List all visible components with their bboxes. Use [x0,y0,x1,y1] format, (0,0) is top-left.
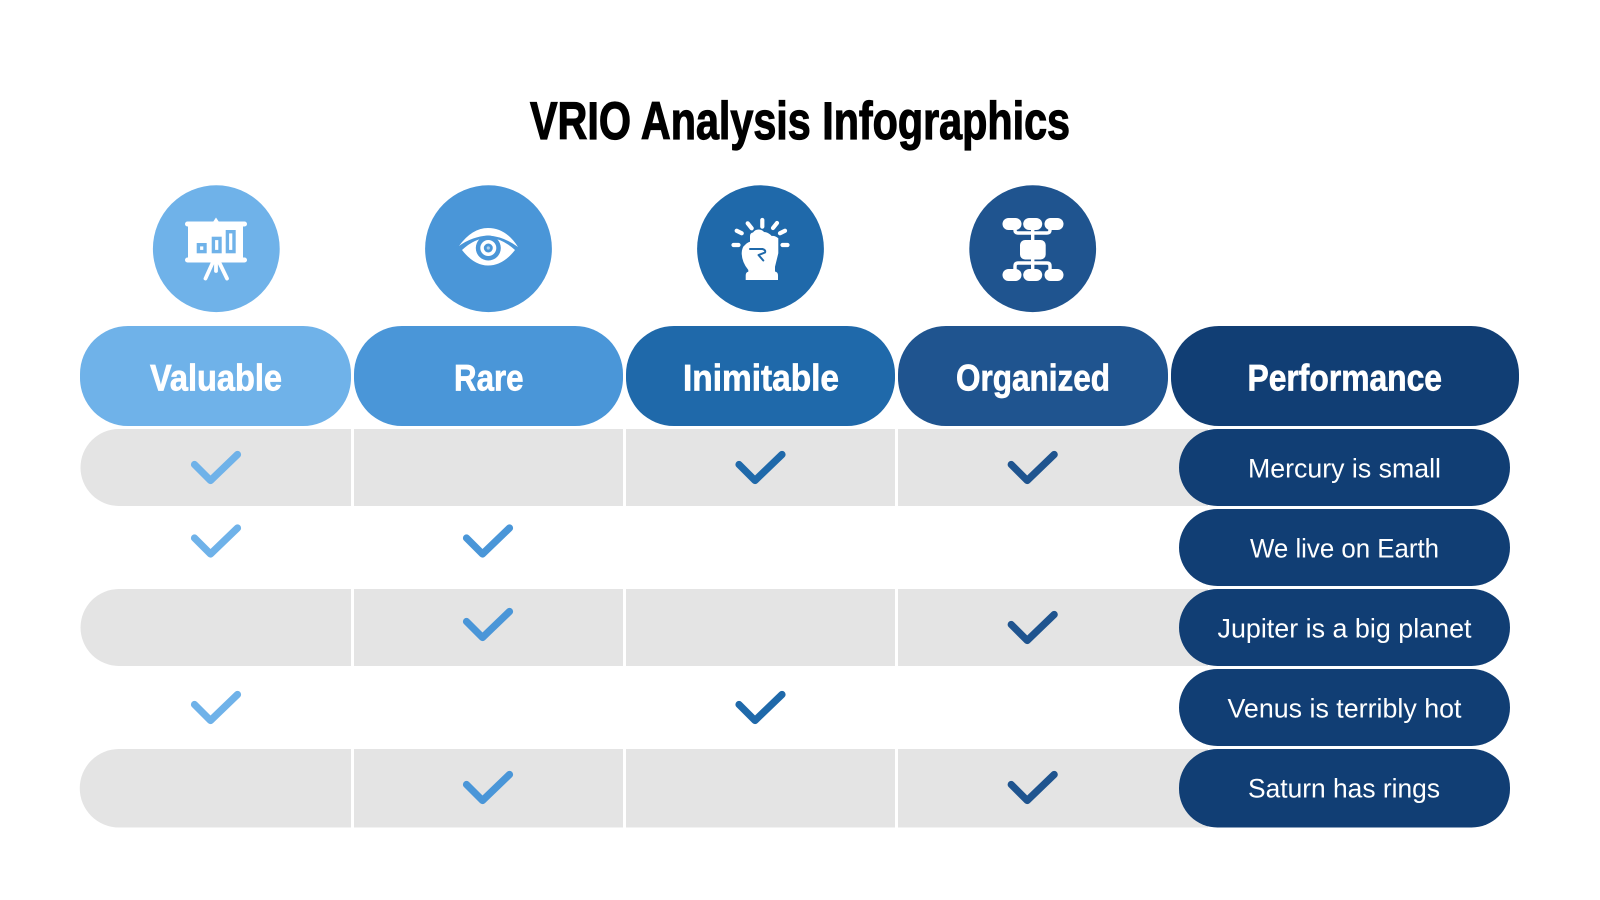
icon: organization chart [969,185,1096,312]
check: row 4 Valuable [194,694,238,720]
check: row 3 Rare [466,612,510,638]
performance: Saturn has rings: Saturn has rings [1248,774,1440,804]
check: row 4 Inimitable [739,694,782,720]
icon: raised fist [697,185,824,312]
title: VRIO Analysis Infographics [530,92,1070,151]
header: Performance [1171,326,1519,426]
header: Inimitable: Inimitable [683,358,839,398]
icon: eye [425,185,552,312]
check: row 3 Organized [1011,614,1054,640]
check: row 5 Rare [466,774,510,800]
performance: Mercury is small: Mercury is small [1248,454,1441,484]
header: Inimitable [626,326,895,426]
header: Organized [898,326,1168,426]
icon: presentation board [153,185,280,312]
table row backgrounds [80,429,1208,828]
check: row 5 Organized [1011,774,1054,800]
performance: Venus is terribly hot: Venus is terribly hot [1228,694,1462,724]
performance: Jupiter is a big planet [1179,589,1510,666]
header: Valuable [80,326,351,426]
performance: Jupiter is a big planet: Jupiter is a big planet [1218,614,1472,644]
check: row 2 Valuable [194,528,238,554]
header: Organized: Organized [956,358,1110,398]
performance: We live on Earth [1179,509,1510,586]
header: Rare [354,326,623,426]
performance: We live on Earth: We live on Earth [1250,534,1439,564]
header: Performance: Performance [1248,358,1442,398]
check: row 1 Inimitable [739,454,782,480]
header: Valuable: Valuable [150,358,282,398]
check: row 2 Rare [466,528,510,554]
check: row 1 Organized [1011,454,1054,480]
performance: Saturn has rings [1179,749,1510,828]
check: row 1 Valuable [194,454,238,480]
header: Rare: Rare [454,358,524,398]
performance: Mercury is small [1179,429,1510,506]
performance: Venus is terribly hot [1179,669,1510,746]
